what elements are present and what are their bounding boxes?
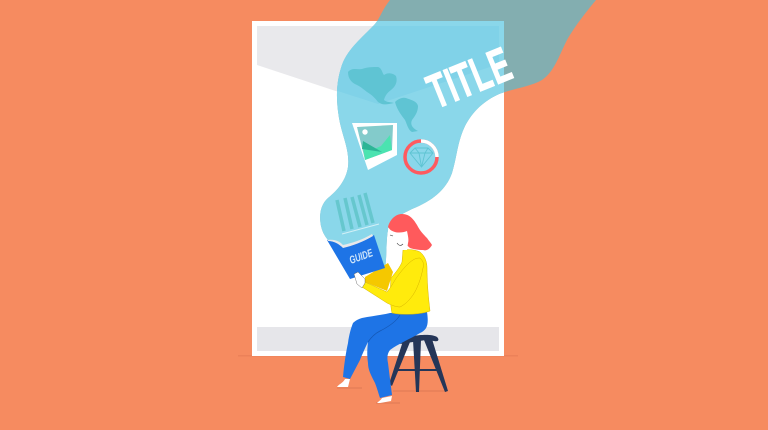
book label: GUIDE: [348, 247, 375, 267]
hand: [354, 272, 365, 288]
diamond: [410, 148, 433, 167]
title text: TITLE: [420, 38, 519, 119]
right foot: [377, 396, 392, 403]
front arm: [362, 258, 424, 307]
stool: [389, 335, 448, 392]
poster header band: [257, 26, 499, 105]
legs: [343, 312, 428, 398]
torso: [390, 250, 430, 314]
light beam: [320, 0, 596, 270]
icon: world map: [348, 67, 418, 132]
icon: photo: [352, 123, 397, 170]
icon: diamond donut: [405, 141, 437, 173]
back arm: [365, 263, 393, 291]
face: [388, 228, 408, 250]
floor shadow: [238, 355, 518, 356]
illustration: woman reading: [327, 214, 448, 403]
hair back: [388, 214, 432, 250]
icon: barcode lines: [337, 193, 379, 234]
floor shadows: [337, 388, 446, 403]
panel: poster page: [252, 21, 504, 356]
left foot: [337, 379, 350, 387]
poster footer band: [257, 327, 499, 351]
book: [327, 234, 385, 279]
